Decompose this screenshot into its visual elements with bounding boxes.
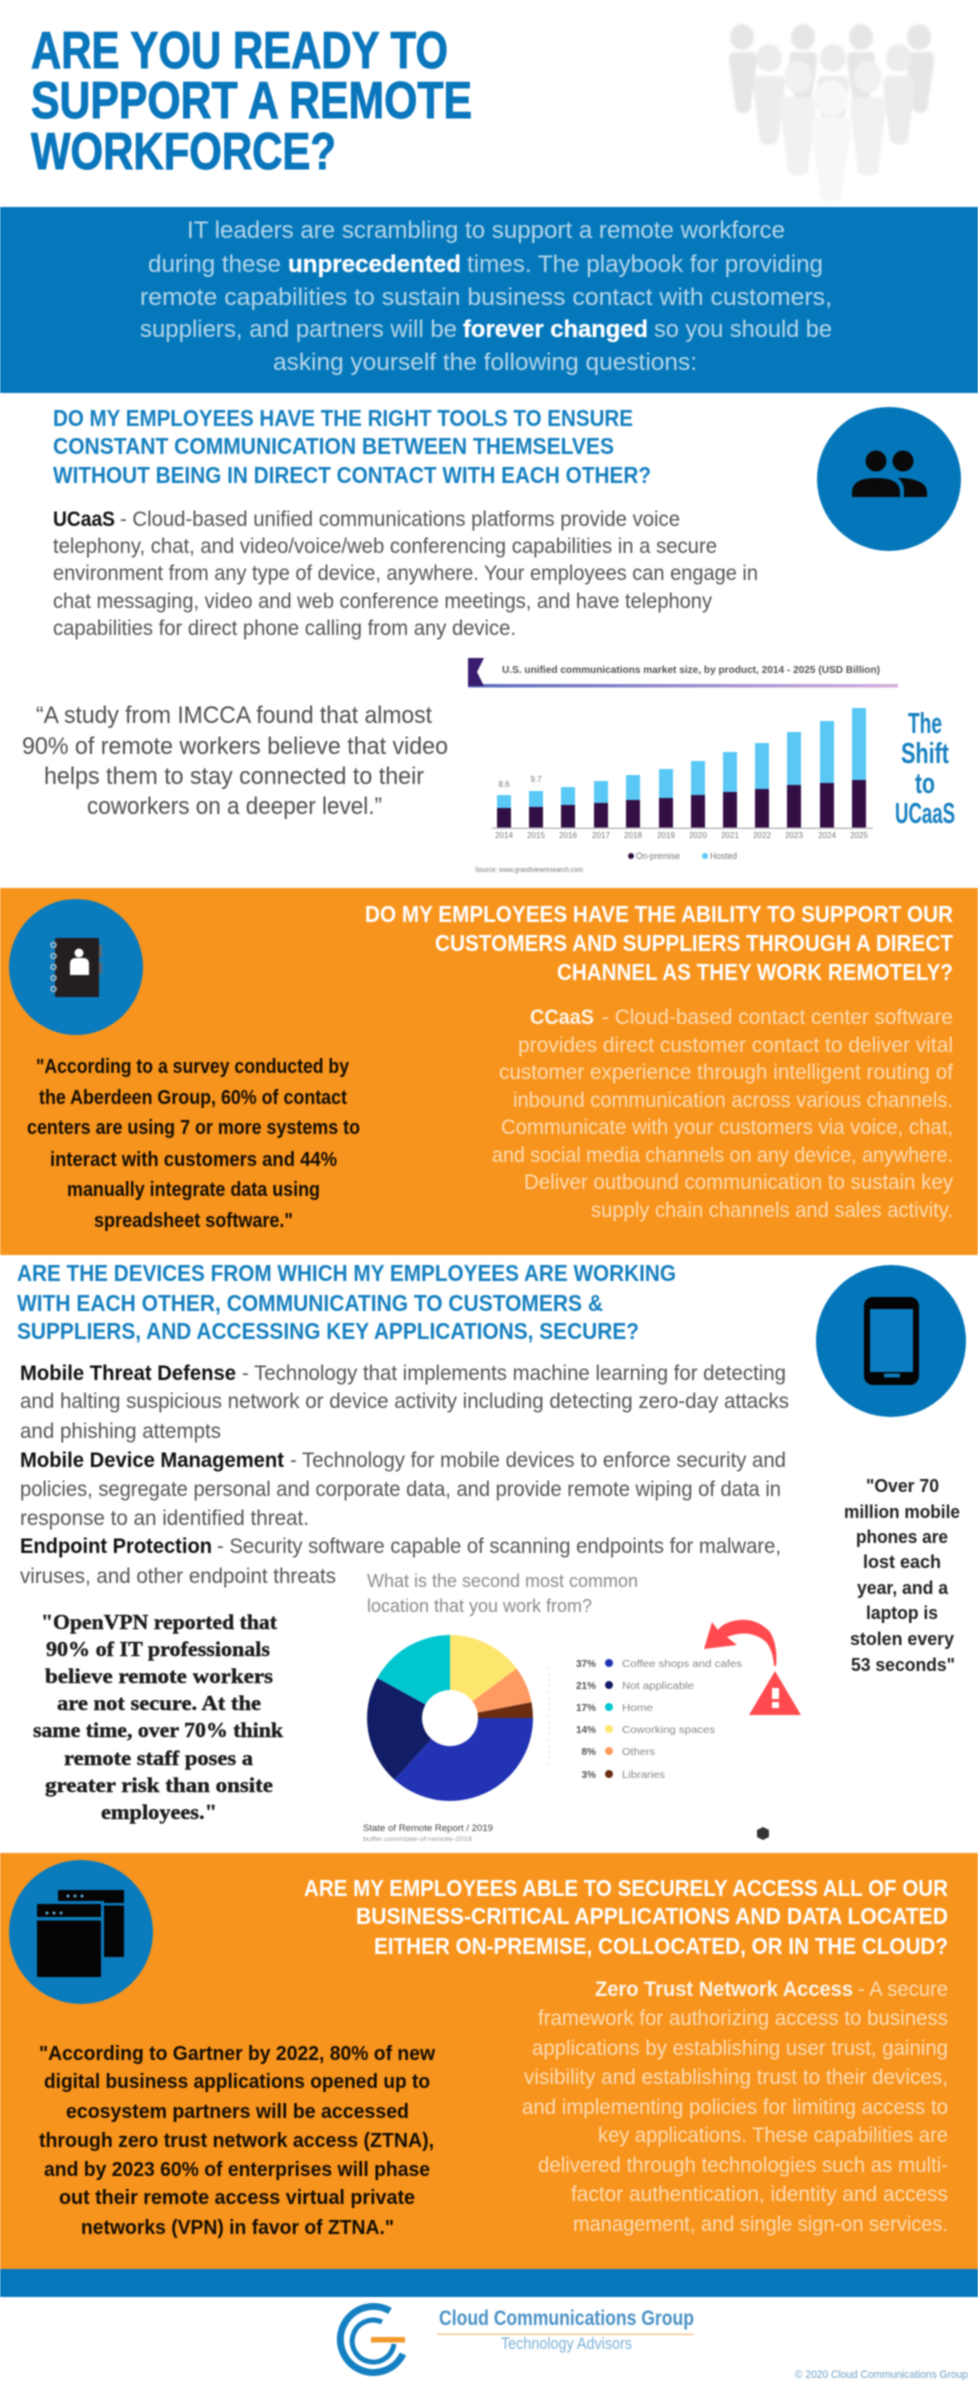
text block: Zero Trust Network Access: delivered through technologies such as multi-	[538, 2154, 948, 2177]
text block: Zero Trust Network Access: and implementing policies for limiting access to	[522, 2096, 948, 2119]
panel: intro band: during these	[148, 251, 281, 278]
icon: two people in blue circle	[817, 407, 961, 551]
text block: security technologies: - Technology that implements machine learning for detecting	[242, 1362, 786, 1385]
text block: Zero Trust Network Access: applications by establishing user trust, gaining	[532, 2037, 948, 2060]
quote: OpenVPN report: employees."	[101, 1800, 217, 1824]
quote: OpenVPN report	[33, 1610, 283, 1824]
icon: contact book in blue circle	[9, 899, 143, 1035]
panel: intro band: so you should be	[654, 316, 832, 343]
quote: IMCCA study: “A study from IMCCA found that almost	[36, 702, 432, 729]
chart source	[363, 1823, 769, 1843]
text block: Zero Trust Network Access: key applications. These capabilities are	[598, 2124, 948, 2147]
text block: security technologies: viruses, and other endpoint threats	[20, 1565, 336, 1588]
chart legend: On-premise	[636, 851, 680, 861]
logo: Cloud Communications Group: Technology Advisors	[501, 2334, 632, 2353]
chart bars: 2019	[657, 831, 675, 840]
panel: UCaaS section	[22, 405, 961, 874]
text block: Zero Trust Network Access: factor authentication, identity and access	[571, 2183, 948, 2206]
quote: IMCCA study: helps them to stay connected to their	[44, 763, 424, 790]
quote: Aberdeen Group survey: manually integrate data using	[67, 1179, 320, 1201]
text block: Zero Trust Network Access: visibility and establishing trust to their devices,	[524, 2066, 948, 2089]
chart legend: Coworking spaces	[622, 1725, 715, 1736]
panel: intro band: asking yourself the following questions:	[273, 349, 697, 376]
quote: Aberdeen Group survey: interact with customers and 44%	[50, 1149, 337, 1171]
text block: security technologies: policies, segregate personal and corporate data, and provide remote wiping of data in	[20, 1478, 781, 1501]
quote: mobile phones lost: "Over 70	[866, 1476, 939, 1496]
chart bars: 2020	[689, 831, 707, 840]
quote: mobile phones lost: year, and a	[857, 1578, 949, 1598]
text block: CCaaS description: Deliver outbound communication to sustain key	[524, 1171, 953, 1194]
text block: CCaaS description	[492, 1006, 953, 1222]
bar chart: U.S. unified communications market size	[468, 658, 898, 874]
heading: right tools	[53, 405, 651, 488]
chart bars: 2015	[527, 831, 545, 840]
text block: CCaaS description: and social media channels on any device, anywhere.	[492, 1144, 953, 1167]
logo: Cloud Communications Group	[340, 2306, 694, 2372]
chart source: buffer.com/state-of-remote-2019	[363, 1837, 473, 1843]
quote: mobile phones lost: laptop is	[866, 1603, 938, 1623]
chart bars	[492, 708, 873, 840]
heading: devices secure	[17, 1260, 676, 1344]
text block: UCaaS description: UCaaS	[53, 508, 115, 531]
chart legend	[549, 1659, 742, 1781]
quote: Gartner ZTNA: and by 2023 60% of enterprises will phase	[44, 2159, 430, 2181]
text block: security technologies: and phishing attempts	[20, 1420, 221, 1443]
quote: mobile phones lost: stolen every	[850, 1629, 954, 1649]
chart bars: 2023	[785, 831, 803, 840]
panel: intro band: unprecedented	[288, 251, 461, 278]
donut segments	[367, 1635, 533, 1801]
quote: mobile phones lost: phones are	[856, 1527, 948, 1547]
text block: UCaaS description: - Cloud-based unified communications platforms provide voice	[120, 508, 680, 531]
heading: devices secure: WITH EACH OTHER, COMMUNICATING TO CUSTOMERS &	[17, 1290, 603, 1316]
heading: devices secure: ARE THE DEVICES FROM WHICH MY EMPLOYEES ARE WORKING	[17, 1260, 676, 1286]
quote: Gartner ZTNA: digital business applications opened up to	[44, 2071, 430, 2093]
chart bars: 2025	[850, 831, 868, 840]
text block: Zero Trust Network Access: framework for authorizing access to business	[538, 2007, 948, 2030]
quote: OpenVPN report: are not secure. At the	[57, 1691, 261, 1715]
quote: Aberdeen Group survey: "According to a survey conducted by	[36, 1056, 350, 1078]
quote: OpenVPN report: "OpenVPN reported that	[41, 1610, 277, 1634]
callout: The Shift to UCaaS: The	[908, 708, 942, 740]
chart legend: Hosted	[710, 851, 737, 861]
icon: concentric C mark	[340, 2306, 405, 2372]
quote: IMCCA study: coworkers on a deeper level.”	[87, 793, 382, 820]
chart title: location that you work from?	[367, 1596, 592, 1616]
chart legend: 37%	[576, 1659, 596, 1670]
text block: UCaaS description: environment from any type of device, anywhere. Your employees can engage in	[53, 562, 758, 585]
chart bars: 2021	[721, 831, 739, 840]
quote: Aberdeen Group survey: spreadsheet software."	[94, 1210, 293, 1232]
quote: OpenVPN report: same time, over 70% think	[33, 1718, 283, 1742]
chart legend: 21%	[576, 1681, 596, 1692]
text block: Zero Trust Network Access	[522, 1978, 948, 2236]
chart legend: Libraries	[622, 1770, 665, 1781]
panel: intro band: IT leaders are scrambling to support a remote workforce	[187, 217, 785, 244]
text block: security technologies: response to an identified threat.	[20, 1507, 309, 1530]
text block: security technologies: Mobile Device Management	[20, 1449, 284, 1472]
text block: security technologies	[20, 1362, 789, 1588]
text block: CCaaS description: CCaaS	[530, 1006, 594, 1029]
chart bars: 2017	[592, 831, 610, 840]
chart bars: 2014	[495, 831, 513, 840]
chart bars: 2024	[818, 831, 836, 840]
callout: The Shift to UCaaS: to	[915, 768, 935, 800]
arrow: red curved arrow	[704, 1620, 776, 1666]
text block: CCaaS description: - Cloud-based contact center software	[602, 1006, 953, 1029]
callout: The Shift to UCaaS	[895, 708, 955, 830]
chart title	[367, 1571, 638, 1616]
chart legend: Coffee shops and cafes	[622, 1659, 742, 1670]
heading: secure access	[304, 1875, 948, 1959]
panel: CCaaS section	[0, 888, 978, 1255]
chart title: What is the second most common	[367, 1571, 638, 1591]
heading: right tools: WITHOUT BEING IN DIRECT CONTACT WITH EACH OTHER?	[53, 462, 651, 488]
chart bars: 9.7	[530, 775, 542, 784]
text block: CCaaS description: customer experience through intelligent routing of	[499, 1061, 953, 1084]
panel: zero trust section	[0, 1853, 978, 2269]
chart title	[468, 658, 898, 688]
icon: crowd of people	[729, 24, 934, 202]
quote: OpenVPN report: 90% of IT professionals	[46, 1637, 270, 1661]
text block: security technologies: - Technology for mobile devices to enforce security and	[290, 1449, 786, 1472]
text block: UCaaS description: capabilities for direct phone calling from any device.	[53, 617, 516, 640]
quote: Gartner ZTNA: "According to Gartner by 2022, 80% of new	[39, 2043, 435, 2065]
chart source: Source: www.grandviewresearch.com	[475, 867, 583, 874]
text block: security technologies: and halting suspicious network or device activity including detecting zero-day attacks	[20, 1390, 789, 1413]
footer band	[0, 2269, 978, 2297]
chart legend: 14%	[576, 1725, 596, 1736]
text block: Zero Trust Network Access: Zero Trust Network Access	[595, 1978, 853, 2001]
quote: Gartner ZTNA: networks (VPN) in favor of ZTNA."	[81, 2217, 394, 2239]
chart bars: 2018	[624, 831, 642, 840]
text block: Zero Trust Network Access: management, and single sign-on services.	[573, 2213, 948, 2236]
quote: OpenVPN report: remote staff poses a	[64, 1746, 254, 1770]
quote: Gartner ZTNA	[39, 2043, 435, 2239]
title	[31, 22, 472, 181]
quote: OpenVPN report: greater risk than onsite	[45, 1773, 273, 1797]
logo: Cloud Communications Group: Cloud Communications Group	[439, 2307, 694, 2330]
chart legend: 8%	[582, 1747, 596, 1758]
text block: CCaaS description: provides direct customer contact to deliver vital	[518, 1034, 953, 1057]
chart legend: 17%	[576, 1703, 596, 1714]
chart source: State of Remote Report / 2019	[363, 1823, 493, 1833]
heading: devices secure: SUPPLIERS, AND ACCESSING KEY APPLICATIONS, SECURE?	[17, 1318, 639, 1344]
quote: Aberdeen Group survey: the Aberdeen Group, 60% of contact	[39, 1087, 347, 1109]
panel: intro band: remote capabilities to sustain business contact with customers,	[140, 284, 832, 311]
quote: Aberdeen Group survey: centers are using 7 or more systems to	[27, 1117, 360, 1139]
donut chart: second most common work location	[363, 1571, 769, 1843]
text block: security technologies: Endpoint Protection	[20, 1535, 212, 1558]
text block: security technologies: Mobile Threat Defense	[20, 1362, 236, 1385]
title: ARE YOU READY TO	[31, 22, 448, 80]
panel: device security section	[17, 1260, 966, 1843]
heading: direct channel	[365, 901, 953, 985]
quote: OpenVPN report: believe remote workers	[45, 1664, 273, 1688]
text block: Zero Trust Network Access: - A secure	[858, 1978, 948, 2001]
panel: intro band: forever changed	[463, 316, 648, 343]
icon: application windows in blue circle	[9, 1860, 153, 2004]
quote: mobile phones lost: lost each	[863, 1552, 941, 1572]
quote: Gartner ZTNA: ecosystem partners will be accessed	[66, 2101, 409, 2123]
callout: The Shift to UCaaS: Shift	[901, 738, 949, 770]
text block: UCaaS description: telephony, chat, and video/voice/web conferencing capabilities in a secure	[53, 535, 717, 558]
title: SUPPORT A REMOTE	[31, 72, 472, 130]
heading: right tools: CONSTANT COMMUNICATION BETWEEN THEMSELVES	[53, 433, 614, 459]
copyright: © 2020 Cloud Communications Group	[795, 2369, 968, 2381]
chart bars: 2016	[559, 831, 577, 840]
quote: mobile phones lost: 53 seconds"	[851, 1655, 955, 1675]
chart bars: 8.6	[498, 780, 510, 789]
panel: intro band: suppliers, and partners will be	[140, 316, 457, 343]
text block: CCaaS description: inbound communication across various channels.	[513, 1089, 953, 1112]
panel: intro band: times. The playbook for providing	[467, 251, 823, 278]
text block: CCaaS description: supply chain channels and sales activity.	[591, 1199, 953, 1222]
text block: UCaaS description	[53, 508, 758, 640]
chart legend: Home	[622, 1703, 653, 1714]
chart legend: Not applicable	[622, 1681, 694, 1692]
quote: mobile phones lost: million mobile	[844, 1502, 960, 1522]
quote: IMCCA study	[22, 702, 448, 820]
icon: warning triangle	[749, 1671, 801, 1715]
chart legend	[628, 851, 737, 861]
icon: mobile phone in blue circle	[816, 1265, 966, 1417]
quote: mobile phones lost	[844, 1476, 960, 1675]
heading: right tools: DO MY EMPLOYEES HAVE THE RIGHT TOOLS TO ENSURE	[53, 405, 633, 431]
quote: IMCCA study: 90% of remote workers believe that video	[22, 733, 448, 760]
panel: intro band	[0, 207, 978, 393]
text block: CCaaS description: Communicate with your customers via voice, chat,	[501, 1116, 953, 1139]
chart legend: Others	[622, 1747, 655, 1758]
quote: Gartner ZTNA: out their remote access virtual private	[59, 2187, 415, 2209]
chart bars: 2022	[753, 831, 771, 840]
chart legend: 3%	[582, 1770, 596, 1781]
quote: Gartner ZTNA: through zero trust network access (ZTNA),	[39, 2130, 434, 2152]
text block: security technologies: - Security software capable of scanning endpoints for malware,	[217, 1535, 781, 1558]
quote: Aberdeen Group survey	[27, 1056, 360, 1232]
text block: UCaaS description: chat messaging, video and web conference meetings, and have telephony	[53, 590, 712, 613]
title: WORKFORCE?	[31, 123, 336, 181]
chart title: U.S. unified communications market size, by product, 2014 - 2025 (USD Billion)	[502, 665, 880, 676]
